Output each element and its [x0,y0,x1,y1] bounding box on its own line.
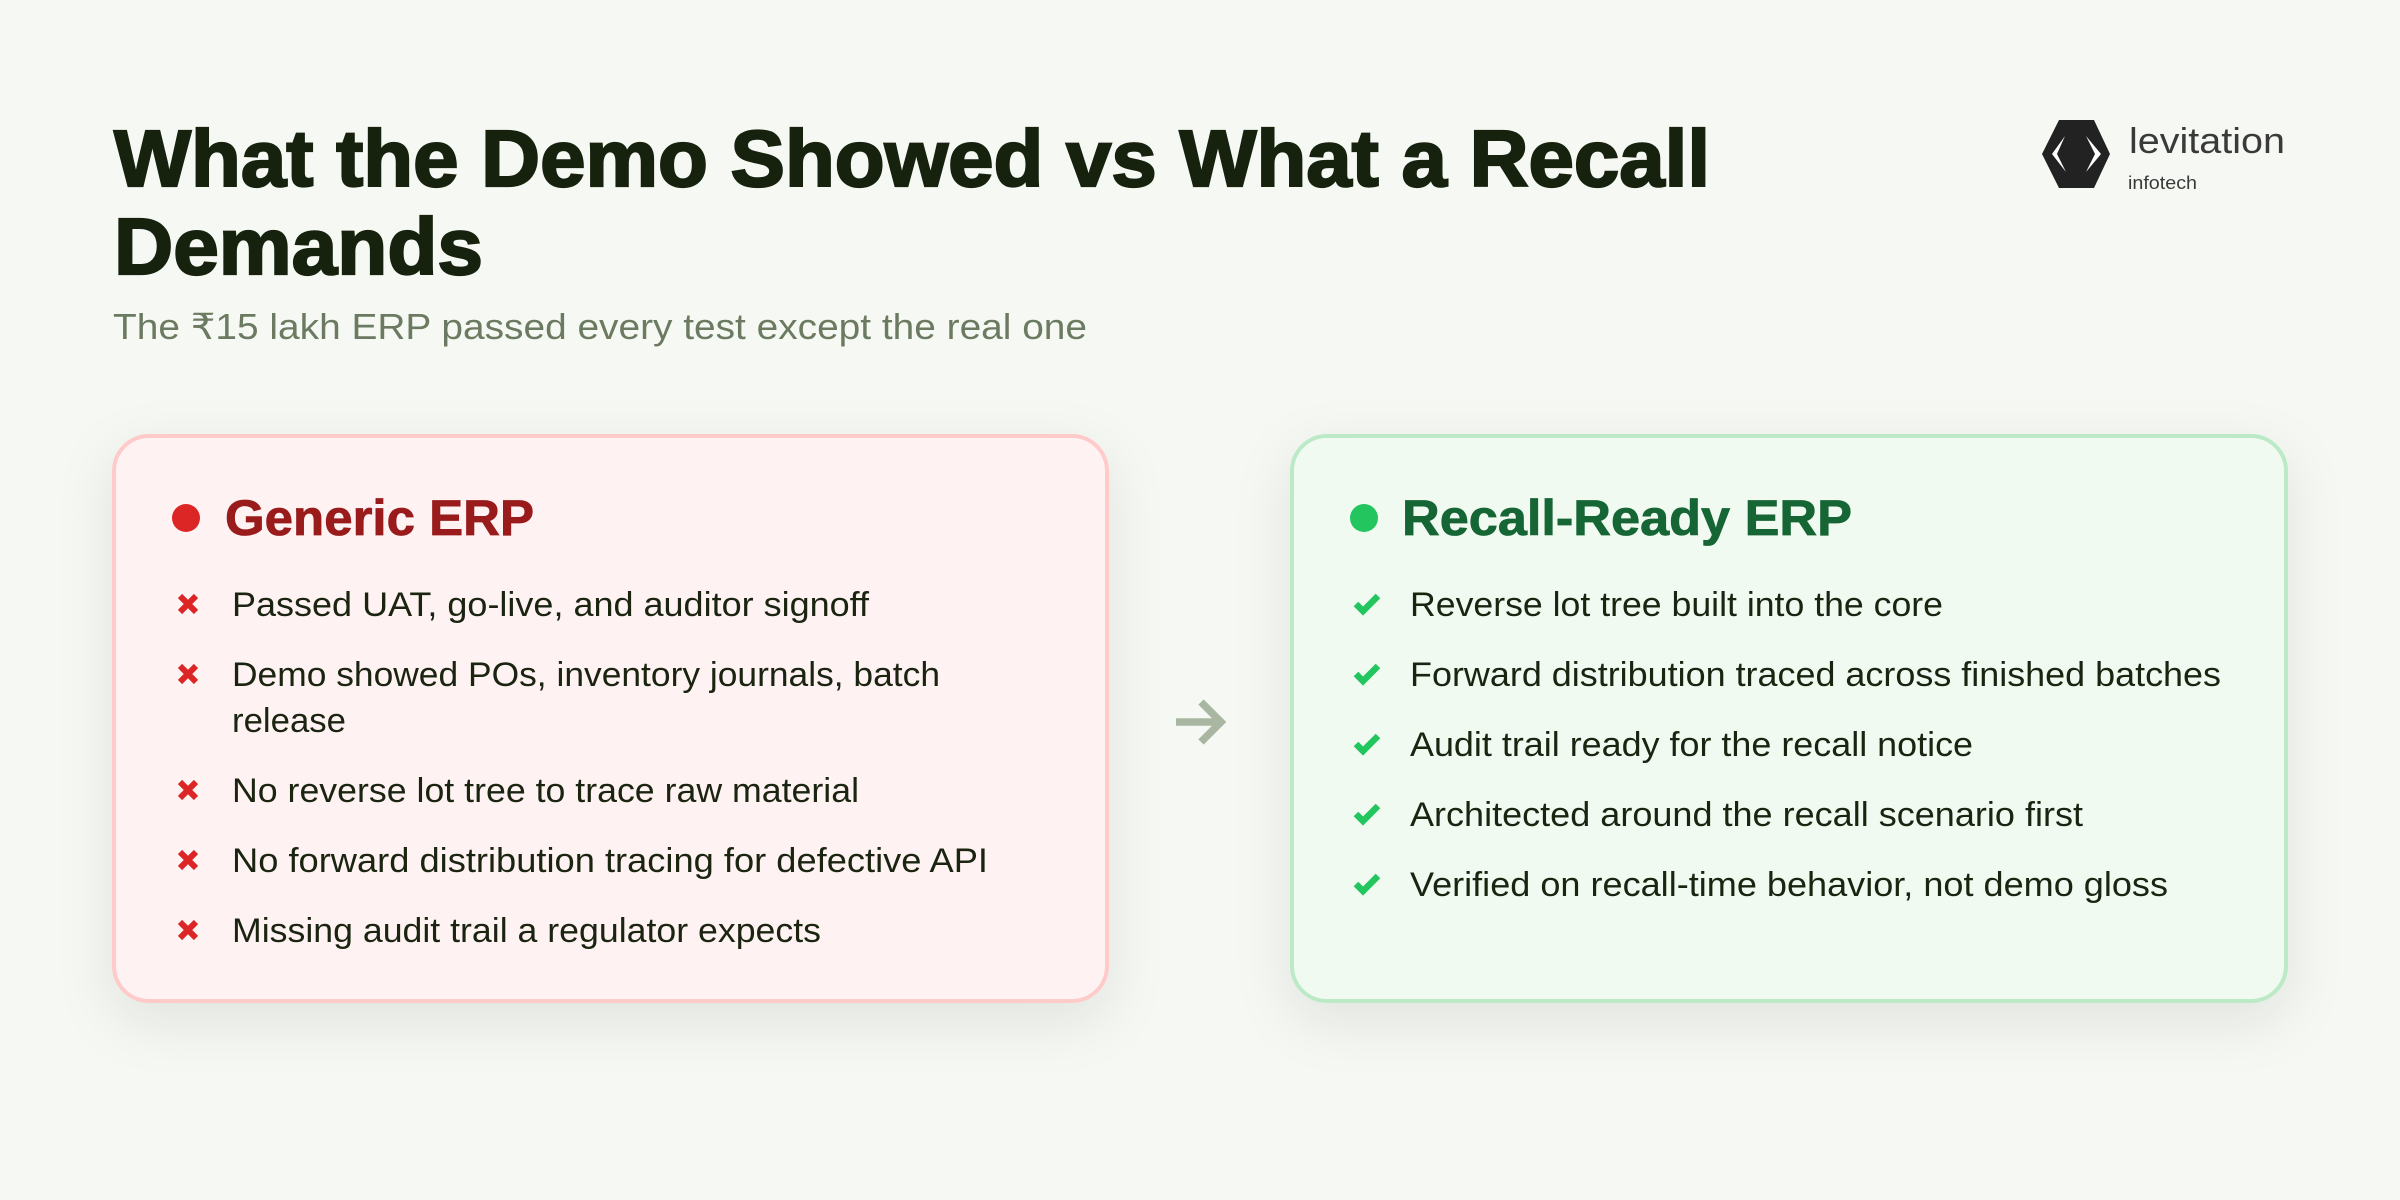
logo sub-wordmark: infotech [2128,173,2197,193]
panel background [1292,436,2286,1001]
list item: No forward distribution tracing for defective API [232,842,988,880]
title: What the Demo Showed vs What a Recall [114,114,1710,203]
list item: release [232,702,346,740]
panel background [114,436,1107,1001]
subtitle: The ₹15 lakh ERP passed every test except the real one [113,306,1087,347]
list item: Passed UAT, go-live, and auditor signoff [232,586,869,624]
icon: hexagon logo mark [2042,120,2110,188]
arrow [1176,702,1221,742]
list item: Forward distribution traced across finished batches [1410,656,2221,694]
list item: Audit trail ready for the recall notice [1410,726,1973,764]
logo: levitation infotech [2042,120,2285,193]
list item: Demo showed POs, inventory journals, batch [232,656,940,694]
panel heading: recall-ready ERP: Recall-Ready ERP [1402,490,1852,546]
panel heading: generic ERP: Generic ERP [225,490,534,546]
list item: Architected around the recall scenario first [1410,796,2083,834]
title [114,114,1710,291]
list item: Verified on recall-time behavior, not demo gloss [1410,866,2168,904]
list item: Reverse lot tree built into the core [1410,586,1943,624]
list item [180,656,940,740]
panel: recall-ready ERP [1292,436,2286,1001]
list item: No reverse lot tree to trace raw material [232,772,859,810]
list item: Missing audit trail a regulator expects [232,912,821,950]
panel: generic ERP [114,436,1107,1001]
title: Demands [114,202,483,291]
logo wordmark: levitation [2129,120,2285,161]
